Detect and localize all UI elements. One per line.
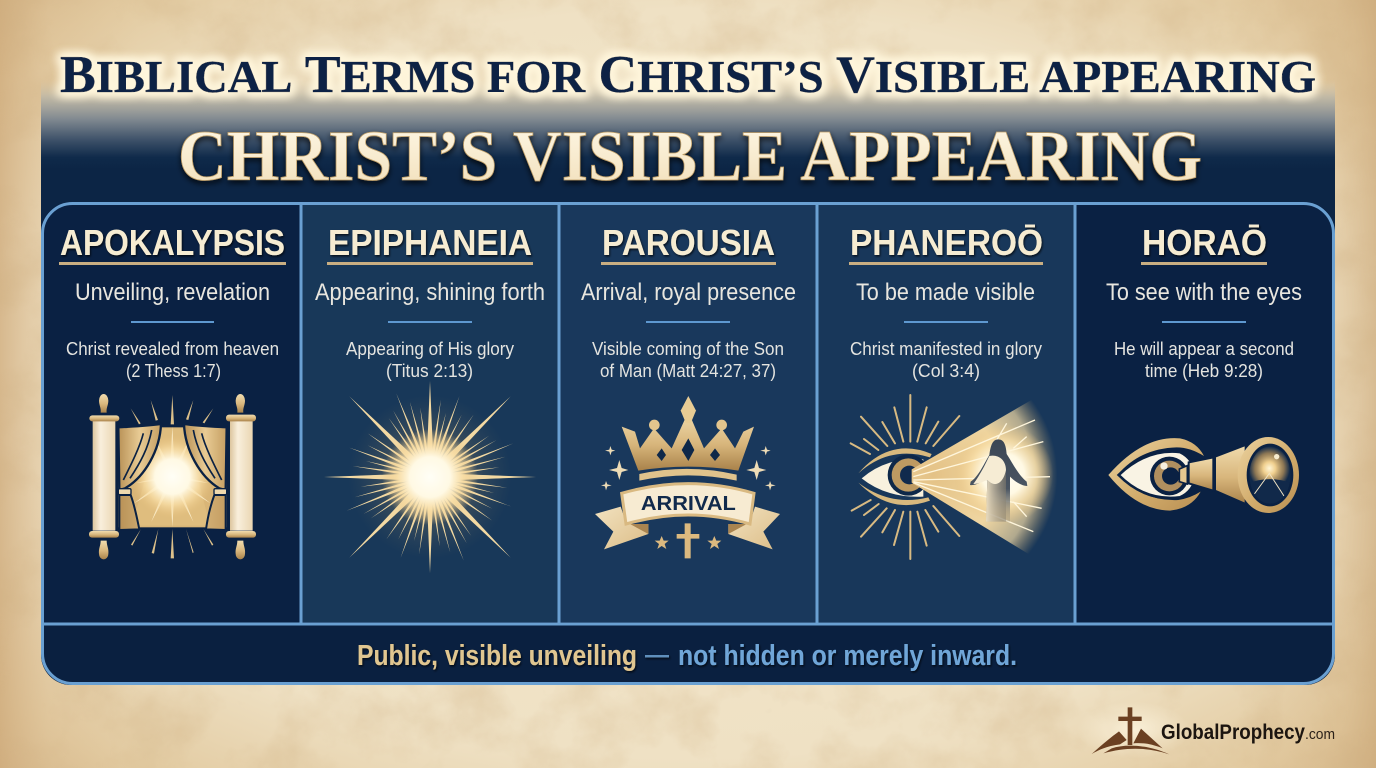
description: Christ revealed from heaven bbox=[66, 339, 279, 359]
navy header band bbox=[41, 80, 1335, 170]
eye bbox=[1108, 438, 1204, 511]
column: Phaneroo text: (Col 3:4) bbox=[912, 361, 980, 381]
description: Visible coming of the Son bbox=[592, 339, 784, 359]
crown bbox=[622, 396, 754, 481]
description: Christ manifested in glory bbox=[850, 339, 1042, 359]
meaning: To see with the eyes bbox=[1106, 279, 1302, 306]
cross and stars bbox=[677, 523, 699, 558]
panel: Parousia column background bbox=[559, 204, 817, 622]
column: Parousia text: of Man (Matt 24:27, 37) bbox=[600, 361, 776, 381]
footer statement bbox=[357, 640, 1017, 672]
telescope bbox=[1179, 466, 1187, 484]
heading: PHANEROŌ bbox=[850, 222, 1043, 263]
wordmark: GlobalProphecy bbox=[1161, 721, 1305, 744]
logo: GlobalProphecy.com bbox=[1077, 702, 1335, 758]
heading: EPIPHANEIA bbox=[328, 222, 532, 263]
beam of light bbox=[912, 396, 1080, 560]
heading: APOKALYPSIS bbox=[60, 222, 285, 263]
panel: Phaneroo column background bbox=[817, 204, 1075, 622]
figure of Christ bbox=[970, 439, 1027, 522]
column: Parousia text bbox=[581, 222, 796, 381]
column: Epiphaneia text: (Titus 2:13) bbox=[386, 361, 473, 381]
column: Apokalypsis text: (2 Thess 1:7) bbox=[126, 361, 221, 381]
footer statement: Public, visible unveiling bbox=[357, 640, 637, 672]
sparkles bbox=[601, 446, 776, 490]
icon: crown with arrival banner bbox=[595, 396, 780, 558]
subtitle: CHRIST’S VISIBLE APPEARING bbox=[178, 116, 1202, 196]
panel: Horao column background bbox=[1075, 204, 1333, 622]
footer statement: not hidden or merely inward. bbox=[678, 640, 1017, 672]
title: BIBLICAL TERMS FOR CHRIST’S VISIBLE APPEARING bbox=[60, 46, 1316, 104]
icon: scroll with curtains bbox=[89, 394, 256, 559]
meaning: Appearing, shining forth bbox=[315, 279, 545, 306]
meaning: Arrival, royal presence bbox=[581, 279, 796, 306]
logo: GlobalProphecy.com: .com bbox=[1305, 726, 1335, 743]
icon: eye and telescope bbox=[1108, 437, 1299, 513]
icon: radiant starburst bbox=[324, 381, 536, 573]
column: Phaneroo text bbox=[849, 222, 1043, 381]
eye bbox=[858, 448, 932, 473]
meaning: Unveiling, revelation bbox=[75, 279, 270, 306]
icon: cross on hill bbox=[1077, 702, 1190, 758]
meaning: To be made visible bbox=[856, 279, 1035, 306]
rays bbox=[851, 395, 959, 559]
description: He will appear a second bbox=[1114, 339, 1294, 359]
panel: Epiphaneia column background bbox=[301, 204, 559, 622]
ribbon with label bbox=[622, 484, 754, 524]
heading: HORAŌ bbox=[1142, 222, 1267, 263]
ribbon with label: ARRIVAL bbox=[641, 492, 736, 515]
main navy panel bbox=[41, 168, 1335, 685]
icon: eye beholding Christ in light bbox=[851, 395, 1080, 560]
column: Epiphaneia text bbox=[315, 222, 545, 381]
description: Appearing of His glory bbox=[346, 339, 514, 359]
panel: Apokalypsis column background bbox=[43, 204, 301, 622]
column: Horao text: time (Heb 9:28) bbox=[1145, 361, 1263, 381]
ribbon tails bbox=[595, 507, 648, 549]
column: Apokalypsis text bbox=[59, 222, 286, 381]
telescope lens view bbox=[1250, 446, 1290, 496]
column: Horao text bbox=[1106, 222, 1302, 381]
heading: PAROUSIA bbox=[602, 222, 775, 263]
